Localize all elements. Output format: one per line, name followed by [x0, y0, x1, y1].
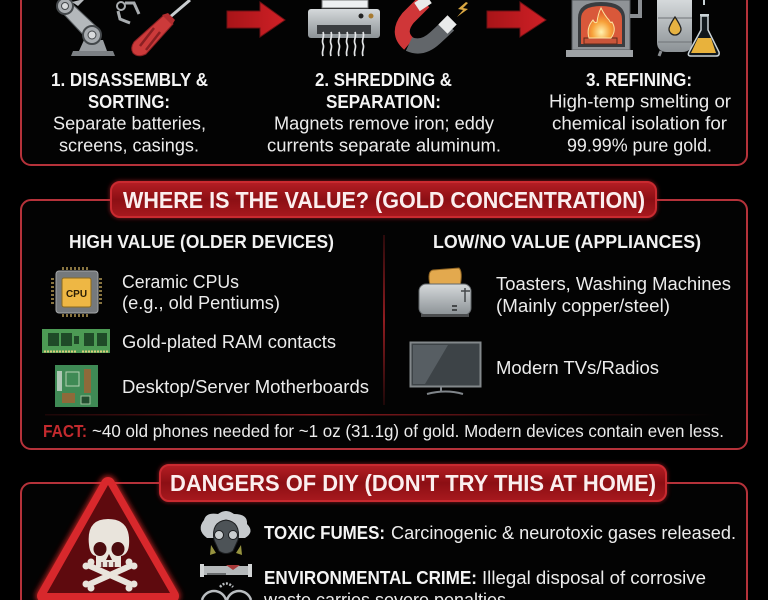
step 1 text: screens, casings.	[59, 136, 199, 156]
text: ceramic CPUs: (e.g., old Pentiums)	[122, 293, 280, 313]
text: ceramic CPUs	[122, 272, 280, 313]
text: toasters	[496, 274, 731, 316]
icon: magnet	[402, 0, 468, 46]
text: environmental crime: Illegal disposal of corrosive	[482, 568, 706, 588]
icon: flask	[688, 0, 719, 56]
text: ceramic CPUs: Ceramic CPUs	[122, 272, 239, 292]
icon: shredder	[308, 0, 380, 56]
arrow: step 1 to 2	[227, 2, 285, 37]
text: environmental crime: ENVIRONMENTAL CRIME:	[264, 568, 477, 588]
subheading: low value: LOW/NO VALUE (APPLIANCES)	[433, 231, 701, 252]
heading: dangers	[159, 464, 667, 502]
step 1 text: 1. DISASSEMBLY &	[51, 70, 208, 90]
step 1 text: SORTING:	[88, 92, 170, 112]
step 2 text: currents separate aluminum.	[267, 136, 501, 156]
step 3 text: chemical isolation for	[552, 114, 727, 134]
text: toxic fumes: TOXIC FUMES:	[264, 523, 385, 543]
step 2 text: SEPARATION:	[326, 92, 441, 112]
callout: fact: ~40 old phones needed for ~1 oz (31.1g) of gold. Modern devices contain even less.	[92, 421, 724, 441]
step 2 text: 2. SHREDDING &	[315, 70, 452, 90]
step 3 text	[549, 70, 731, 156]
text: environmental crime	[263, 568, 706, 600]
panel: dangers of DIY	[21, 464, 747, 600]
heading: dangers: DANGERS OF DIY (DON'T TRY THIS AT HOME)	[170, 470, 656, 496]
callout: fact: FACT:	[43, 421, 87, 441]
icon: warning triangle with skull	[44, 484, 172, 596]
text: toxic fumes: Carcinogenic & neurotoxic gases released.	[391, 523, 736, 543]
text: motherboards: Desktop/Server Motherboards	[122, 377, 369, 397]
icon: toaster	[419, 268, 471, 317]
step 3 text: 3. REFINING:	[586, 70, 692, 90]
icon: storage tank	[657, 0, 692, 56]
icon: corroded pipe	[200, 564, 252, 577]
step 1 text: Separate batteries,	[53, 114, 206, 134]
icon: screwdriver	[132, 0, 190, 56]
text: modern TVs: Modern TVs/Radios	[496, 358, 659, 378]
icon: television	[410, 342, 480, 394]
icon: CPU	[51, 267, 102, 317]
icon: RAM stick	[42, 329, 110, 353]
step 2 text	[267, 70, 501, 156]
icon: handcuffs	[202, 584, 251, 600]
icon: CPU: CPU	[66, 289, 87, 300]
step 3 text: High-temp smelting or	[549, 92, 731, 112]
icon: gripper	[117, 2, 139, 23]
panel: recovery process	[21, 0, 747, 165]
icon: furnace	[566, 0, 640, 57]
icon: motherboard	[55, 365, 98, 407]
step 1 text	[51, 70, 208, 156]
panel: where is the value	[21, 181, 747, 449]
heading: gold concentration: WHERE IS THE VALUE? (GOLD CONCENTRATION)	[123, 187, 645, 213]
icon: robotic arm	[57, 0, 115, 56]
subheading: high value: HIGH VALUE (OLDER DEVICES)	[69, 231, 334, 252]
text: RAM contacts: Gold-plated RAM contacts	[122, 332, 336, 352]
icon: gas mask and fumes	[201, 511, 251, 555]
arrow: step 2 to 3	[487, 2, 546, 37]
text: toasters: (Mainly copper/steel)	[496, 296, 670, 316]
step 3 text: 99.99% pure gold.	[567, 136, 712, 156]
text: toasters: Toasters, Washing Machines	[496, 274, 731, 294]
heading: gold concentration	[110, 181, 657, 218]
step 2 text: Magnets remove iron; eddy	[274, 114, 494, 134]
